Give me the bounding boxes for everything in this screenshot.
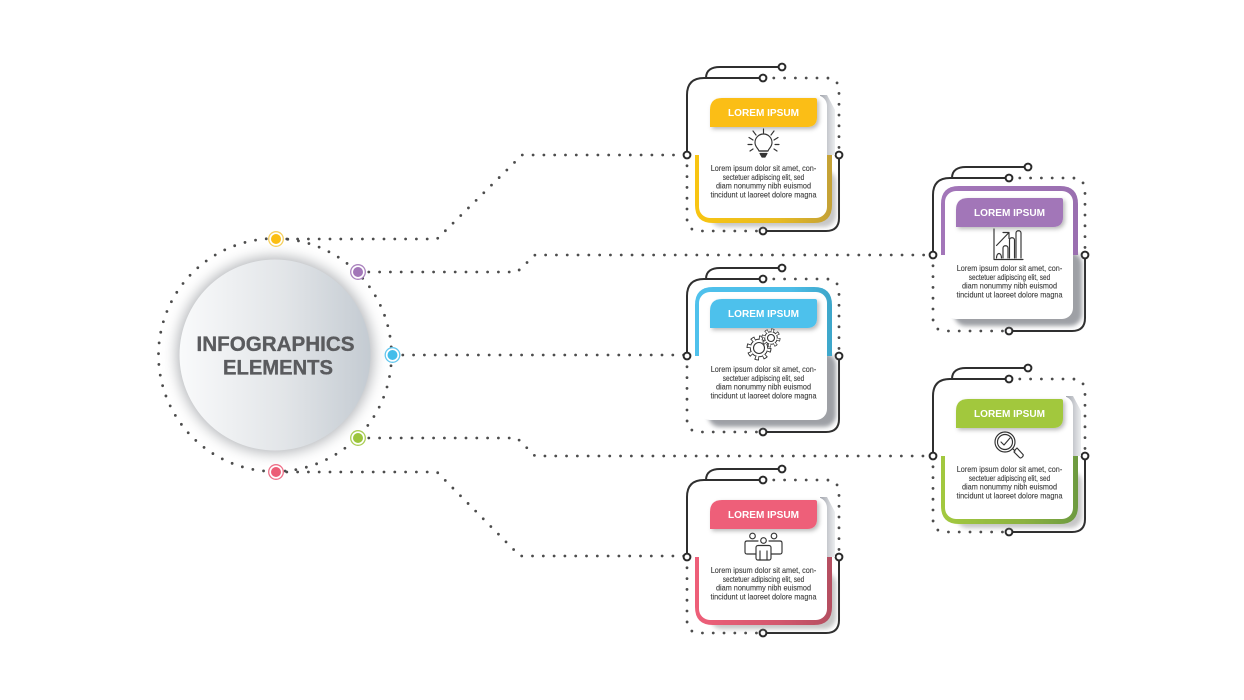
label <box>710 500 817 529</box>
card body <box>695 95 836 227</box>
label <box>710 98 817 127</box>
label <box>956 198 1063 227</box>
label: LOREM IPSUM <box>728 107 799 119</box>
node: yellow <box>269 232 283 246</box>
dotted connector: purple <box>358 255 933 272</box>
panel: card green <box>930 365 1088 535</box>
body text: Lorem ipsum dolor sit amet, con- <box>957 465 1063 474</box>
circuit frame <box>684 466 842 636</box>
circuit frame <box>684 64 842 234</box>
circuit frame <box>930 164 1088 334</box>
body text: tincidunt ut laoreet dolore magna <box>710 190 817 199</box>
panel: card blue <box>684 265 842 435</box>
label <box>956 399 1063 428</box>
body text: sectetuer adipiscing elit, sed <box>723 575 804 584</box>
label: LOREM IPSUM <box>728 509 799 521</box>
central hub <box>158 232 400 479</box>
circuit frame <box>930 365 1088 535</box>
icon: gears <box>748 330 779 358</box>
body text: sectetuer adipiscing elit, sed <box>969 474 1050 483</box>
icon: people <box>745 533 782 560</box>
body text: diam nonummy nibh euismod <box>716 584 811 593</box>
card body <box>941 396 1082 528</box>
body text <box>710 164 817 199</box>
body text: Lorem ipsum dolor sit amet, con- <box>711 164 817 173</box>
body text: sectetuer adipiscing elit, sed <box>969 273 1050 282</box>
circuit frame <box>684 265 842 435</box>
body text <box>956 465 1063 500</box>
label: LOREM IPSUM <box>728 308 799 320</box>
panel: card red <box>684 466 842 636</box>
title <box>196 333 354 380</box>
node: red <box>269 465 283 479</box>
body text: sectetuer adipiscing elit, sed <box>723 173 804 182</box>
body text: diam nonummy nibh euismod <box>962 483 1057 492</box>
card body <box>941 186 1082 326</box>
card body <box>695 287 836 427</box>
body text <box>710 365 817 400</box>
body text: Lorem ipsum dolor sit amet, con- <box>957 264 1063 273</box>
icon: magnifier <box>995 432 1023 458</box>
main disc <box>180 260 370 450</box>
panel: card purple <box>930 164 1088 334</box>
body text: tincidunt ut laoreet dolore magna <box>956 290 1063 299</box>
title: ELEMENTS <box>223 356 333 380</box>
card body <box>695 497 836 629</box>
body text: sectetuer adipiscing elit, sed <box>723 374 804 383</box>
body text <box>956 264 1063 299</box>
label: LOREM IPSUM <box>974 207 1045 219</box>
dotted connector: blue <box>392 354 687 356</box>
icon: bar chart <box>994 229 1023 260</box>
dotted connector: yellow <box>276 155 687 239</box>
body text: diam nonummy nibh euismod <box>716 383 811 392</box>
body text: tincidunt ut laoreet dolore magna <box>710 391 817 400</box>
dotted ring <box>158 238 392 472</box>
label: LOREM IPSUM <box>974 408 1045 420</box>
title: INFOGRAPHICS <box>196 333 354 356</box>
node: blue <box>385 348 400 362</box>
body text: tincidunt ut laoreet dolore magna <box>956 491 1063 500</box>
body text <box>710 566 817 601</box>
dotted connector: red <box>276 472 687 556</box>
dotted connector: green <box>358 438 933 456</box>
label <box>710 299 817 328</box>
body text: Lorem ipsum dolor sit amet, con- <box>711 566 817 575</box>
body text: Lorem ipsum dolor sit amet, con- <box>711 365 817 374</box>
node: purple <box>351 265 365 279</box>
body text: diam nonummy nibh euismod <box>962 282 1057 291</box>
disc shadow <box>177 257 373 453</box>
icon: light bulb <box>748 129 779 157</box>
node: green <box>351 431 365 445</box>
body text: tincidunt ut laoreet dolore magna <box>710 592 817 601</box>
panel: card yellow <box>684 64 842 234</box>
body text: diam nonummy nibh euismod <box>716 182 811 191</box>
